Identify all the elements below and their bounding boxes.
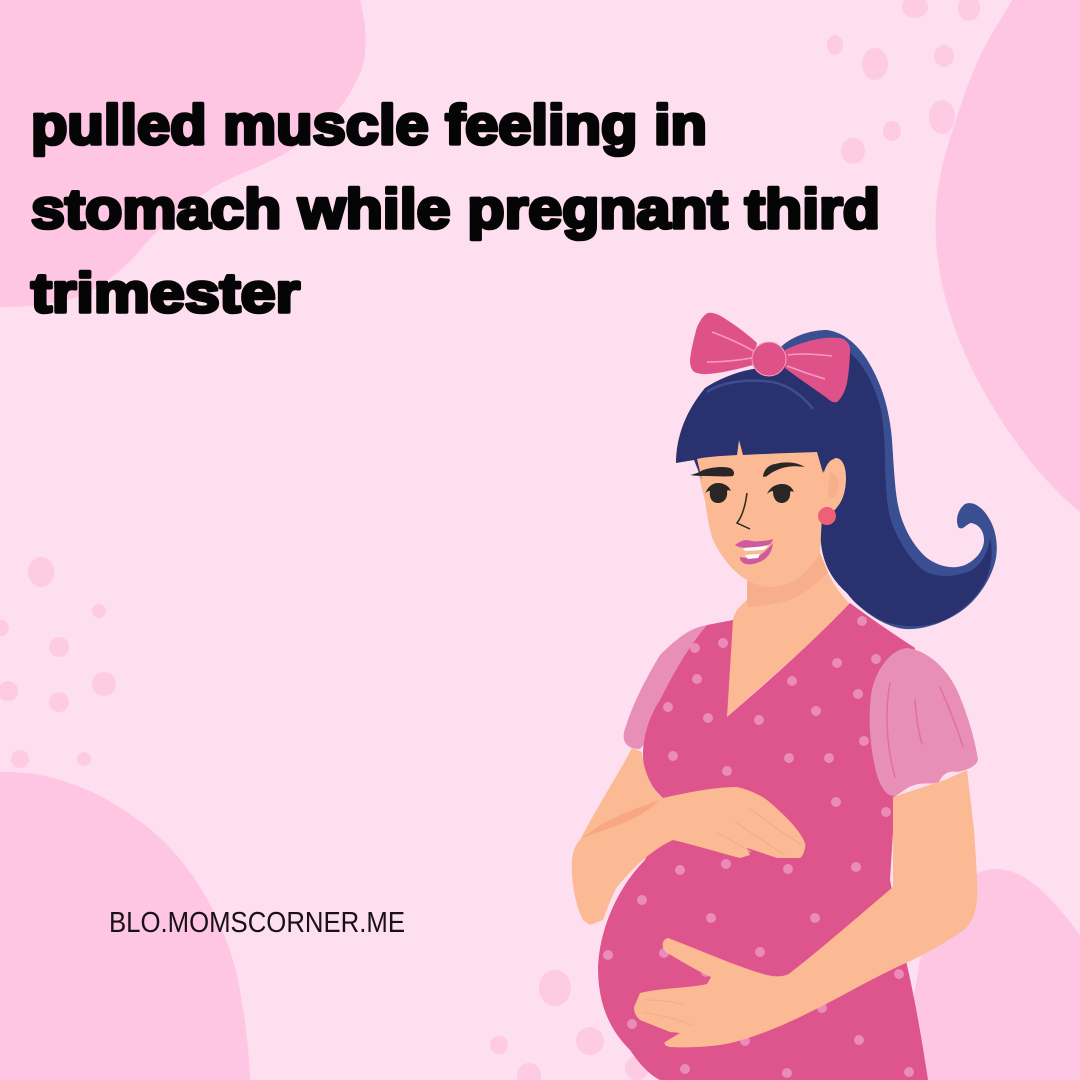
right sleeve (870, 648, 978, 796)
dress (598, 603, 928, 1080)
title: stomach while pregnant third (31, 177, 880, 240)
title: trimester (31, 261, 300, 324)
left sleeve (624, 625, 712, 749)
hair highlight (707, 381, 813, 409)
upper arm and hand (572, 748, 805, 925)
nose (737, 493, 750, 529)
eyebrows (690, 462, 805, 477)
ear detail (828, 472, 838, 498)
lower arm and hand (634, 770, 977, 1047)
eyes (705, 483, 794, 503)
neck and chest (727, 560, 852, 717)
mouth (735, 539, 773, 564)
bangs (676, 366, 838, 480)
earring (818, 507, 836, 525)
face and ear (696, 440, 846, 587)
illustration: pregnant woman (572, 313, 997, 1080)
dress polka dots (603, 616, 914, 1078)
website label: BLO.MOMSCORNER.ME (109, 907, 405, 939)
hair (760, 330, 997, 629)
title: pulled muscle feeling in (31, 93, 707, 156)
title (31, 93, 880, 324)
neck shadow (747, 553, 828, 607)
hair bow (690, 313, 850, 402)
